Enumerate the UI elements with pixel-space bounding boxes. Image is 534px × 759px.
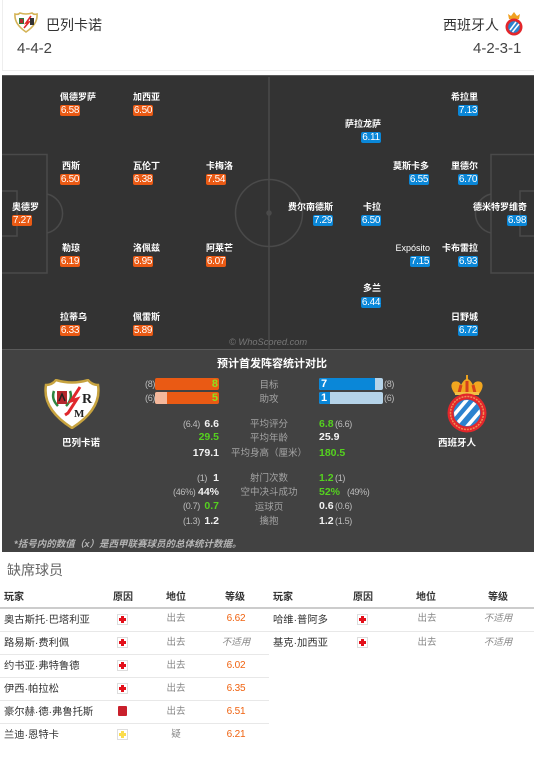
- bar: home goals: [155, 378, 219, 390]
- player: 佩德罗萨: 佩德罗萨: [60, 92, 96, 102]
- row: 兰迪·恩特卡: 6.21: [227, 729, 245, 740]
- football pitch with predicted lineups: [2, 75, 534, 350]
- home average age: 29.5: [199, 431, 219, 443]
- player: 阿莱芒: 阿莱芒: [206, 243, 233, 253]
- player: Expósito: Expósito: [395, 243, 430, 253]
- home team name: 巴列卡诺: [46, 17, 102, 33]
- header: match teams and formations: [2, 0, 534, 71]
- player: 希拉里: 希拉里: [451, 92, 478, 102]
- row: 兰迪·恩特卡: [0, 724, 268, 746]
- player: 瓦伦丁: [133, 161, 160, 185]
- row: 路易斯·费利佩: 路易斯·费利佩: [4, 638, 69, 649]
- home lineup player ratings: [12, 92, 233, 336]
- row: 哈维·普阿多: 哈维·普阿多: [273, 615, 328, 626]
- home tackles baseline: (1.3): [183, 516, 200, 526]
- home average height: 179.1: [193, 447, 219, 459]
- row: 伊西·帕拉松: 出去: [166, 683, 186, 694]
- player: 希拉里: 7.13: [459, 105, 477, 116]
- header row: [268, 585, 534, 609]
- row: 约书亚·弗特鲁德: [4, 660, 246, 672]
- away goals average: (8): [384, 379, 394, 389]
- row: 伊西·帕拉松: [4, 682, 246, 695]
- player: 佩雷斯: 5.89: [134, 325, 152, 336]
- player: 萨拉龙萨: 6.11: [362, 132, 380, 143]
- label: goals: 目标: [259, 380, 278, 391]
- player: 加西亚: 6.50: [134, 105, 152, 116]
- header row: [4, 590, 245, 603]
- pitch markings: [2, 77, 534, 350]
- row: 奥古斯托·巴塔利亚: [4, 612, 246, 626]
- player: 佩德罗萨: 6.58: [61, 105, 79, 116]
- player: 卡布雷拉: [442, 242, 478, 267]
- player: 卡拉: [361, 202, 381, 226]
- player: 佩德罗萨: [60, 92, 96, 116]
- player: 多兰: 6.44: [362, 297, 380, 308]
- home average rating: 6.6: [204, 418, 219, 430]
- player: 佩雷斯: [133, 312, 160, 336]
- player: 里德尔: 6.70: [459, 174, 477, 185]
- player: 莫斯卡多: 6.55: [410, 174, 428, 185]
- row: 基克·加西亚: 不适用: [484, 637, 512, 648]
- home shots: 1: [213, 472, 219, 484]
- panel title: 预计首发阵容统计对比: [217, 358, 327, 370]
- away dribbles baseline: (0.6): [335, 501, 352, 511]
- row: 基克·加西亚: 基克·加西亚: [273, 638, 328, 649]
- row: 伊西·帕拉松: 6.35: [227, 683, 245, 694]
- row: 基克·加西亚: [268, 632, 534, 654]
- row: 基克·加西亚: 出去: [417, 637, 436, 648]
- label: shots: 射门次数: [250, 473, 288, 484]
- icon: Espanyol crest: [448, 375, 486, 432]
- icon: Rayo Vallecano crest: R: [82, 392, 93, 407]
- row: 约书亚·弗特鲁德: 约书亚·弗特鲁德: [4, 661, 80, 672]
- player: 卡梅洛: [206, 161, 233, 185]
- player: 西斯: [60, 161, 80, 185]
- table: away missing players: [268, 585, 534, 655]
- away lineup player ratings: [288, 92, 527, 336]
- table: home missing players: [4, 590, 251, 741]
- row: 奥古斯托·巴塔利亚: 6.62: [227, 613, 245, 624]
- away aerials won: 52%: [319, 486, 340, 498]
- away rating baseline: (6.6): [335, 419, 352, 429]
- icon: injury cross: [357, 614, 368, 625]
- icon: red card: [118, 706, 129, 717]
- bar: home assists: [155, 392, 219, 404]
- player: 希拉里: [451, 92, 478, 116]
- player: 里德尔: [451, 161, 478, 185]
- column: reason: 原因: [113, 592, 133, 603]
- player: 阿莱芒: [206, 243, 233, 267]
- player: Expósito: [395, 243, 430, 267]
- row: 豪尔赫·德·弗鲁托斯: 出去: [166, 706, 186, 717]
- row: 哈维·普阿多: 出去: [417, 613, 436, 624]
- label: aerial duels won: 空中决斗成功: [240, 487, 298, 498]
- column: rating: 等级: [225, 592, 245, 603]
- player: 莫斯卡多: 莫斯卡多: [393, 161, 429, 171]
- row: 路易斯·费利佩: 出去: [166, 637, 186, 648]
- player: 莫斯卡多: [393, 161, 429, 185]
- home average rating baseline: (6.4): [183, 419, 200, 429]
- player: 德米特罗维奇: 6.98: [508, 215, 526, 226]
- column: player: 玩家: [4, 592, 24, 603]
- icon: injury cross: [117, 614, 128, 625]
- player: 勒琼: 6.19: [61, 256, 79, 267]
- icon: injury cross: [117, 683, 128, 694]
- away tackles baseline: (1.5): [335, 516, 352, 526]
- panel: predicted lineup stats comparison: [2, 350, 534, 552]
- away formation: 4-2-3-1: [473, 40, 521, 57]
- bar: away goals: 7: [321, 378, 327, 390]
- home team label: 巴列卡诺: [62, 438, 100, 449]
- row: 路易斯·费利佩: [4, 636, 251, 649]
- column: rating: 等级: [488, 592, 508, 603]
- row: 约书亚·弗特鲁德: 6.02: [227, 660, 245, 671]
- row: 兰迪·恩特卡: 疑: [171, 729, 181, 740]
- home aerials baseline: (46%): [173, 487, 196, 497]
- player: 卡布雷拉: 卡布雷拉: [442, 243, 478, 253]
- row: 哈维·普阿多: 不适用: [484, 613, 512, 624]
- icon: doubtful cross: [117, 729, 128, 740]
- player: 拉蒂乌: 拉蒂乌: [60, 312, 87, 322]
- player: 加西亚: [133, 92, 160, 116]
- away team label: 西班牙人: [438, 438, 476, 449]
- icon: Rayo Vallecano crest small: [14, 12, 38, 33]
- away assists average: (6): [384, 393, 394, 403]
- away average height: 180.5: [319, 447, 345, 459]
- player: 德米特罗维奇: [473, 202, 527, 226]
- away shots: 1.2: [319, 472, 334, 484]
- player: 拉蒂乌: 6.33: [61, 325, 79, 336]
- player: 洛佩兹: 洛佩兹: [133, 243, 160, 253]
- icon: Espanyol crest small: [506, 12, 522, 36]
- row: 豪尔赫·德·弗鲁托斯: 6.51: [227, 706, 245, 717]
- column: status: 地位: [416, 592, 436, 603]
- stats table: shots, aerials, dribbles, tackles: [173, 472, 370, 527]
- row: 豪尔赫·德·弗鲁托斯: [0, 701, 268, 723]
- player: 费尔南德斯: [288, 202, 333, 226]
- icon: injury cross: [357, 637, 368, 648]
- player: 日野城: 6.72: [459, 325, 477, 336]
- player: 加西亚: 加西亚: [133, 92, 160, 102]
- row: 奥古斯托·巴塔利亚: 奥古斯托·巴塔利亚: [4, 615, 90, 626]
- label: average height: 平均身高（厘米）: [231, 448, 307, 459]
- away tackles: 1.2: [319, 515, 334, 527]
- label: assists: 助攻: [259, 394, 278, 405]
- player: 西斯: 6.50: [61, 174, 79, 185]
- player: 卡拉: 卡拉: [363, 202, 381, 212]
- player: 拉蒂乌: [60, 312, 87, 336]
- player: 洛佩兹: [133, 243, 160, 267]
- row: 约书亚·弗特鲁德: 出去: [166, 660, 186, 671]
- player: 多兰: 多兰: [363, 283, 381, 293]
- player: 洛佩兹: 6.95: [134, 256, 152, 267]
- home assists average: (6): [145, 393, 155, 403]
- section heading: missing players: 缺席球员: [7, 562, 63, 578]
- player: Expósito: 7.15: [411, 256, 429, 267]
- player: 日野城: [451, 312, 478, 336]
- player: 日野城: 日野城: [451, 312, 478, 322]
- player: 瓦伦丁: 瓦伦丁: [133, 161, 160, 171]
- row: 兰迪·恩特卡: 兰迪·恩特卡: [4, 730, 59, 741]
- home shots baseline: (1): [197, 473, 207, 483]
- player: 阿莱芒: 6.07: [207, 256, 225, 267]
- away average rating: 6.8: [319, 418, 334, 430]
- player: 费尔南德斯: 费尔南德斯: [288, 202, 333, 212]
- player: 佩雷斯: 佩雷斯: [133, 312, 160, 322]
- row: 奥古斯托·巴塔利亚: 出去: [166, 613, 186, 624]
- row: 豪尔赫·德·弗鲁托斯: 豪尔赫·德·弗鲁托斯: [4, 707, 93, 718]
- player: 德米特罗维奇: 德米特罗维奇: [473, 202, 527, 212]
- player: 奥德罗: 7.27: [13, 215, 31, 226]
- bar: home goals: 8: [212, 378, 218, 390]
- row: 路易斯·费利佩: 不适用: [222, 637, 250, 648]
- column: status: 地位: [166, 592, 186, 603]
- icon: injury cross: [117, 660, 128, 671]
- label: tackles: 擒抱: [259, 516, 278, 527]
- home dribbles: 0.7: [204, 500, 219, 512]
- player: 奥德罗: 奥德罗: [12, 202, 39, 212]
- label: dribbles: 运球页: [255, 502, 283, 513]
- column: player: 玩家: [273, 592, 293, 603]
- home dribbles baseline: (0.7): [183, 501, 200, 511]
- home formation: 4-4-2: [17, 40, 52, 57]
- icon: Rayo Vallecano crest: [44, 379, 100, 429]
- player: 卡梅洛: 7.54: [207, 174, 225, 185]
- icon: injury cross: [117, 637, 128, 648]
- footnote: *括号内的数值（x）是西甲联赛球员的总体统计数据。: [14, 539, 241, 550]
- row: 哈维·普阿多: [268, 609, 534, 631]
- player: 费尔南德斯: 7.29: [314, 215, 332, 226]
- stats table: rating, age, height: [183, 418, 352, 459]
- bar: away assists: [319, 392, 383, 404]
- player: 西斯: 西斯: [62, 161, 80, 171]
- bar: away goals: [319, 378, 383, 390]
- player: 瓦伦丁: 6.38: [134, 174, 152, 185]
- player: 勒琼: [60, 243, 80, 267]
- player: 卡梅洛: 卡梅洛: [206, 161, 233, 171]
- away average age: 25.9: [319, 431, 339, 443]
- away shots baseline: (1): [335, 473, 345, 483]
- player: 多兰: [361, 283, 381, 308]
- column: reason: 原因: [353, 592, 373, 603]
- player: 萨拉龙萨: [345, 118, 381, 143]
- player: 里德尔: 里德尔: [451, 161, 478, 171]
- player: 卡拉: 6.50: [362, 215, 380, 226]
- bar: home assists: 5: [212, 392, 218, 404]
- home aerials won: 44%: [198, 486, 219, 498]
- player: 萨拉龙萨: 萨拉龙萨: [345, 119, 381, 129]
- player: 奥德罗: [12, 202, 39, 226]
- row: 伊西·帕拉松: 伊西·帕拉松: [4, 684, 59, 695]
- home tackles: 1.2: [204, 515, 219, 527]
- home goals average: (8): [145, 379, 155, 389]
- away dribbles: 0.6: [319, 500, 334, 512]
- icon: Rayo Vallecano crest: M: [74, 408, 85, 420]
- player: 卡布雷拉: 6.93: [459, 256, 477, 267]
- label: average age: 平均年龄: [250, 433, 288, 444]
- away team name: 西班牙人: [443, 17, 499, 33]
- player: 勒琼: 勒琼: [62, 243, 80, 253]
- bar: away assists: 1: [321, 392, 327, 404]
- WhoScored watermark: © WhoScored.com: [229, 337, 307, 347]
- label: average rating: 平均评分: [250, 419, 288, 430]
- away aerials baseline: (49%): [347, 487, 370, 497]
